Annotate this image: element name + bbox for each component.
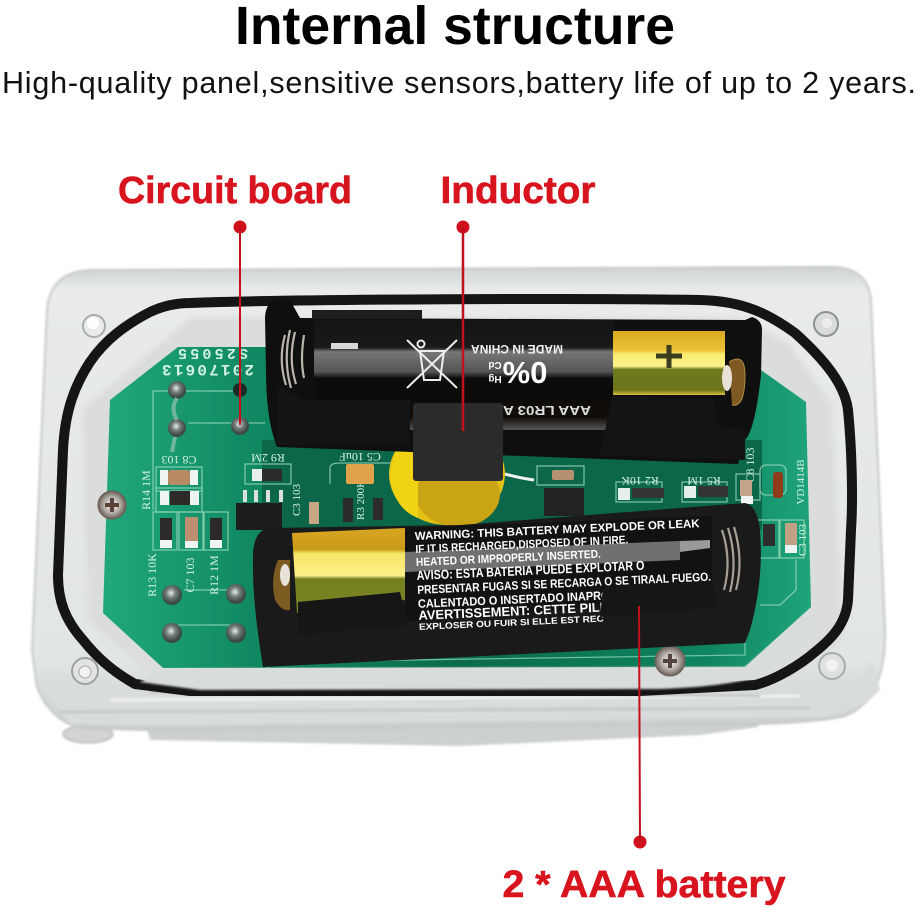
warning text lines: HEATED OR IMPROPERLY INSERTED.	[416, 549, 601, 569]
silk text	[139, 344, 809, 597]
silk text: C5 10uF	[339, 450, 381, 464]
callout: circuit board	[118, 170, 352, 425]
silk text: R5 1M	[687, 474, 721, 488]
O-ring seal	[58, 299, 852, 691]
inductor block	[413, 403, 503, 481]
transparent enclosure body	[32, 267, 885, 730]
silk text: R12 1M	[207, 555, 221, 595]
silk text: R3 200K	[355, 480, 367, 520]
enclosure front lip highlights	[40, 660, 880, 726]
holder clip top	[277, 385, 410, 445]
warning text lines: AVISO: ESTA BATERIA PUEDE EXPLOTAR O	[416, 558, 645, 583]
green circuit board	[103, 344, 811, 668]
silk text: C8 103	[161, 453, 197, 467]
silk text: C3 103	[291, 483, 303, 516]
solder joints	[162, 381, 249, 643]
battery text cd: Cd	[488, 359, 502, 370]
top battery positive gold end	[613, 331, 725, 395]
silk text: R9 2M	[251, 451, 285, 465]
silk text: S25055	[178, 344, 248, 361]
bottom battery label	[405, 516, 712, 622]
silk text: R14 1M	[139, 470, 153, 510]
corner screw: bottom-left	[72, 658, 98, 684]
leader line	[634, 606, 646, 848]
leader line	[234, 220, 246, 425]
yellow capacitor	[389, 423, 505, 527]
corner screw: bottom-right	[819, 653, 845, 679]
enclosure inner frame	[82, 318, 842, 682]
silk text: 20170613	[162, 360, 254, 378]
subtitle: High-quality panel,sensitive sensors,battery life of up to 2 years.	[2, 66, 916, 100]
top battery holder	[265, 299, 762, 464]
board silk screen outlines	[153, 391, 804, 668]
holder clip bottom	[600, 582, 716, 617]
silk text: C7 103	[183, 557, 197, 593]
warning text lines: AVERTISSEMENT: CETTE PILE	[418, 599, 609, 623]
battery text aaa lr03: AAA LR03 A	[502, 403, 591, 418]
silk text: C3 103	[797, 523, 809, 556]
top battery	[277, 310, 745, 460]
label text: Circuit board	[118, 170, 352, 212]
recycle crossed-bin mark	[407, 340, 457, 388]
device photo: opened sensor enclosure	[32, 267, 885, 746]
silk text: R13 10K	[145, 553, 159, 597]
contact left	[273, 560, 290, 610]
spring right	[722, 527, 740, 592]
silk text: R2 10K	[621, 474, 659, 488]
silk text: VD1414B	[795, 459, 807, 505]
silk text: C8 103	[743, 447, 757, 483]
warning text lines	[415, 518, 713, 632]
smd components	[160, 464, 797, 553]
warning text lines: EXPLOSER OU FUIR SI ELLE EST REC	[419, 613, 605, 632]
plus sign	[656, 345, 682, 368]
label text: 2 * AAA battery	[502, 864, 786, 906]
corner screw: top-right	[814, 312, 838, 336]
label text: Inductor	[440, 170, 596, 212]
callout: inductor	[440, 170, 596, 431]
bottom battery	[273, 516, 740, 635]
leader line	[456, 220, 470, 431]
corner screw: top-left	[83, 315, 105, 337]
contact right	[722, 359, 745, 405]
warning text lines: CALENTADO O INSERTADO INAPROPIA	[418, 587, 628, 611]
warning text lines: WARNING: THIS BATTERY MAY EXPLODE OR LEAK	[415, 518, 701, 543]
enclosure lower tier	[145, 715, 758, 746]
holder spring left	[282, 330, 304, 388]
enclosure bottom lip over seal	[140, 610, 812, 690]
callout: battery	[502, 606, 786, 906]
bottom battery holder	[253, 503, 761, 667]
battery text 0%: 0%	[503, 355, 547, 390]
battery text made in china: MADE IN CHINA	[471, 342, 563, 356]
battery text hg: Hg	[488, 373, 502, 384]
board screw: bottom	[655, 617, 685, 676]
bottom foot screw	[63, 725, 113, 743]
warning text lines: IF IT IS RECHARGED,DISPOSED OF IN FIRE.	[415, 534, 629, 556]
board screw: left	[98, 491, 126, 519]
warning text lines: PRESENTAR FUGAS SI SE RECARGA O SE TIRAAL FUEGO.	[417, 570, 711, 597]
gold end	[292, 528, 405, 613]
